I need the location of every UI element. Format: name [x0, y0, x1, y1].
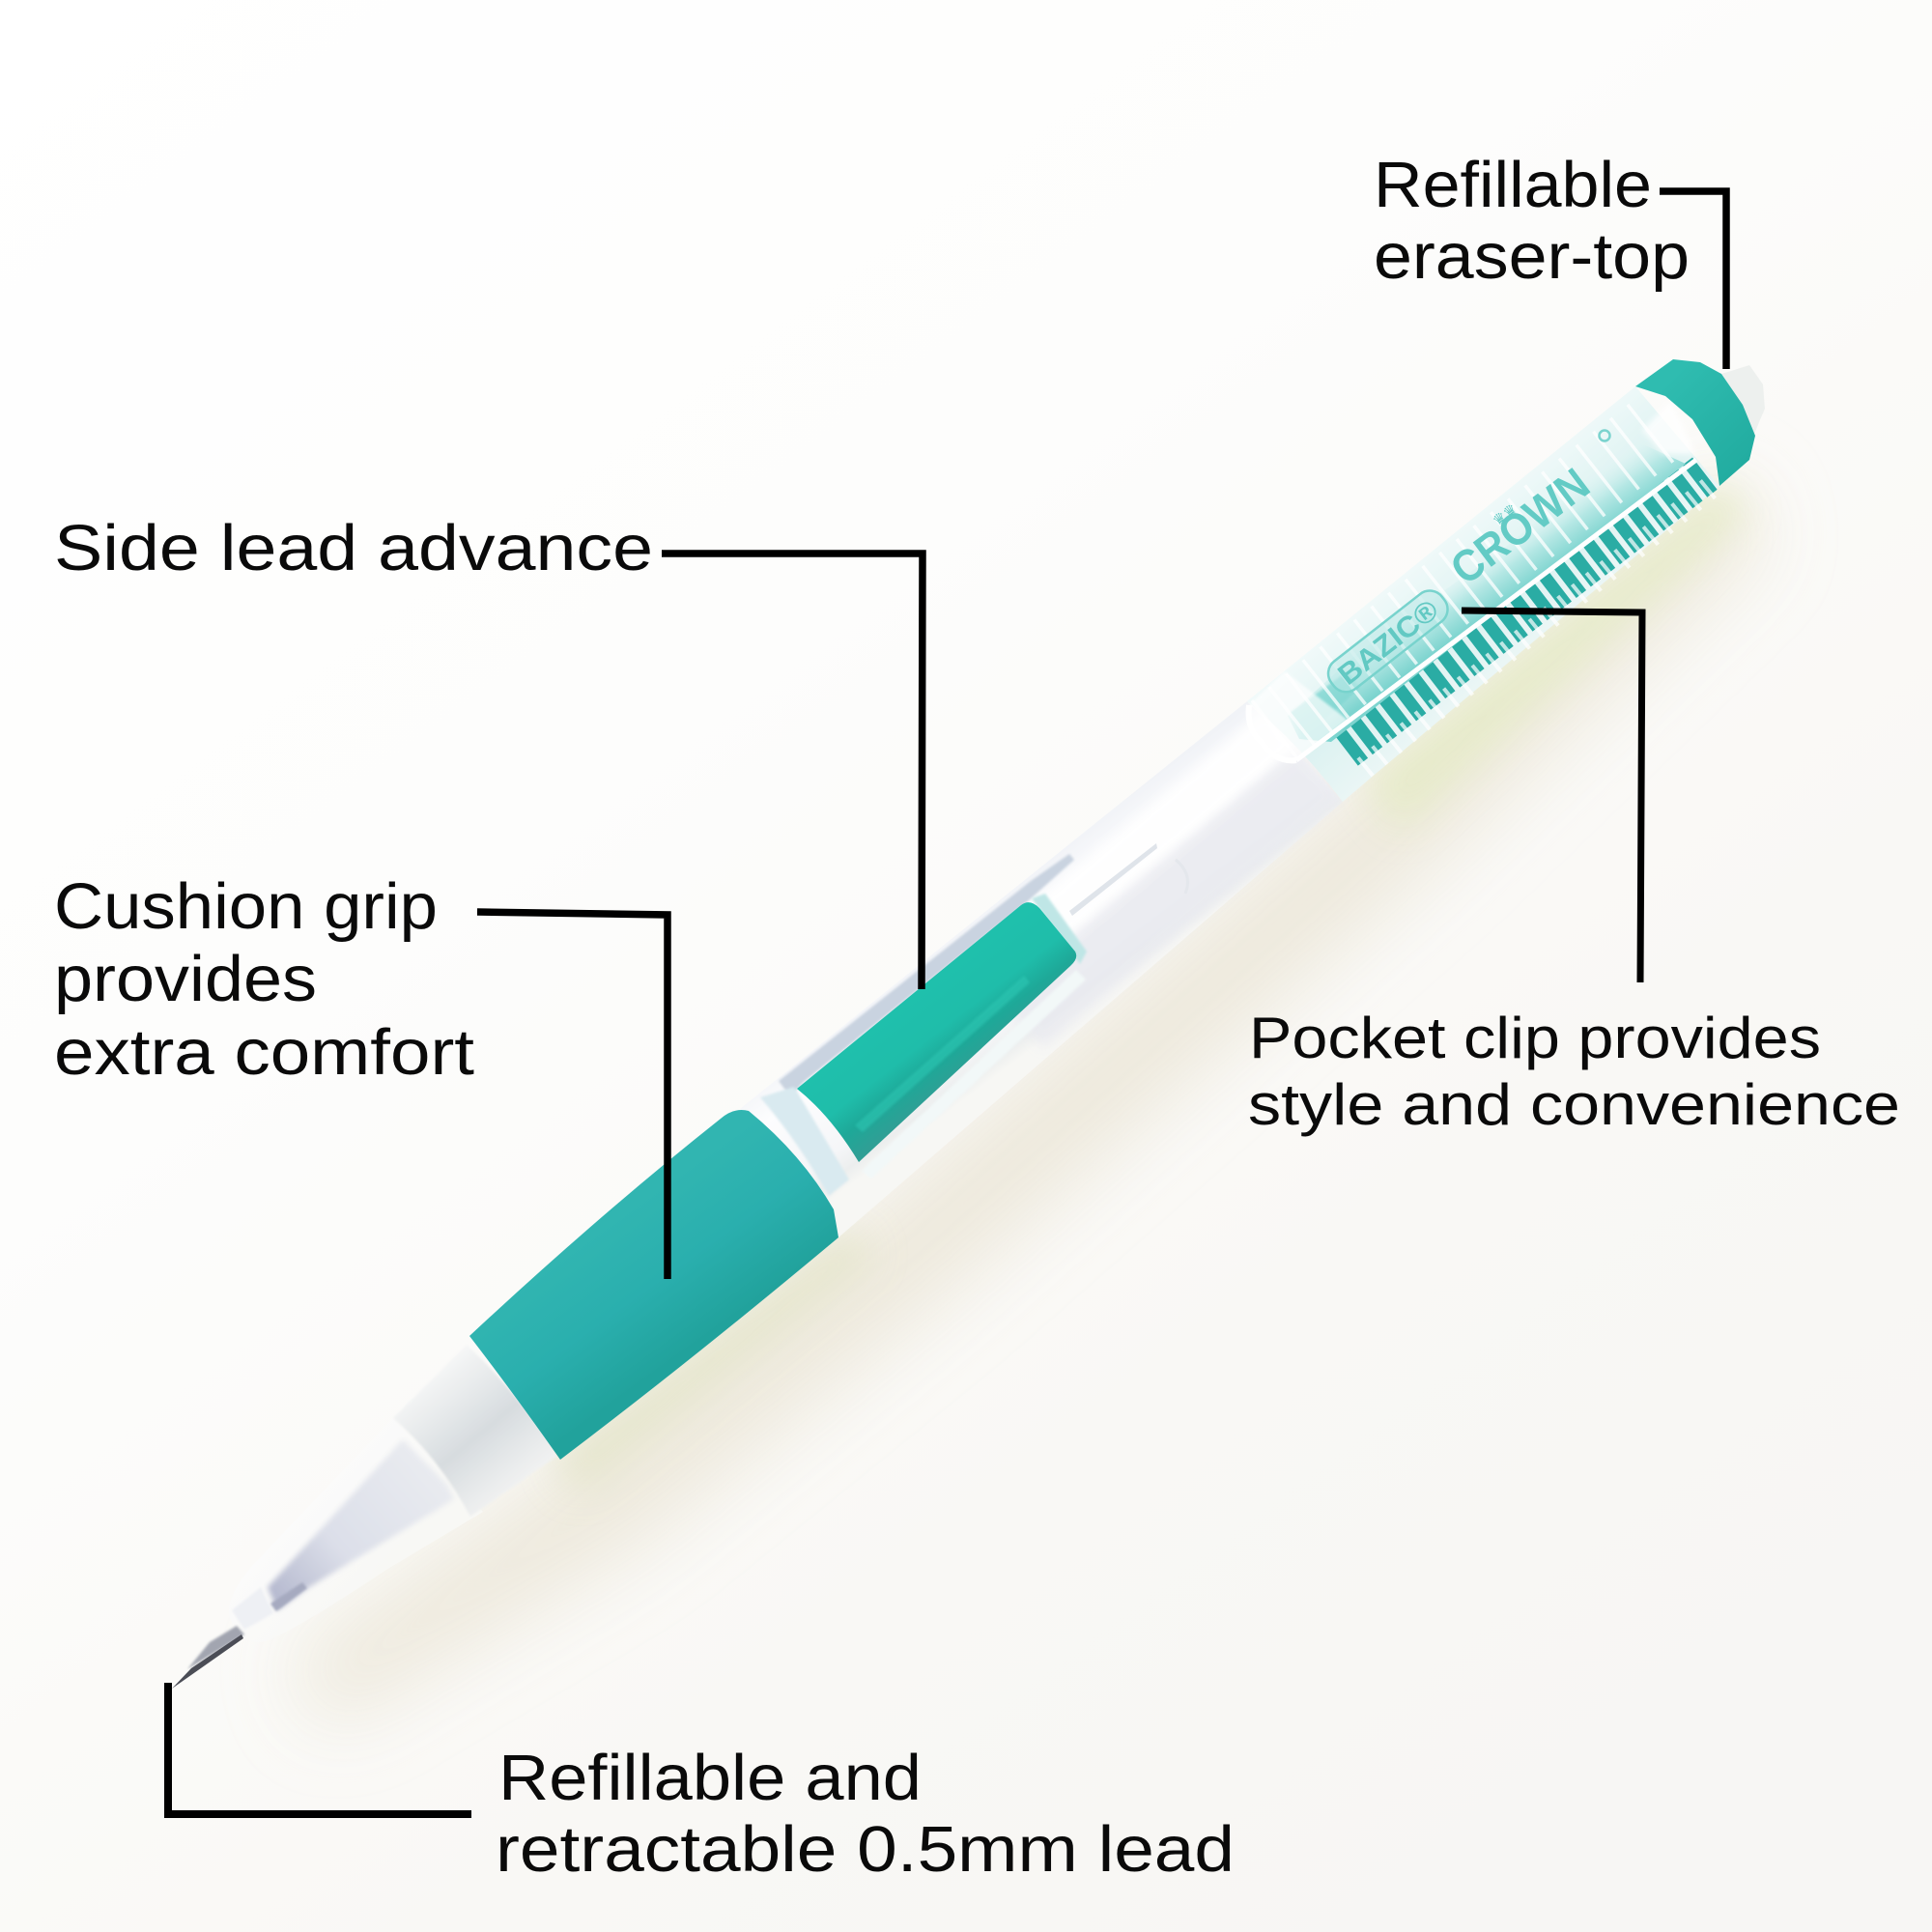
pale teal refill: [1288, 440, 1686, 742]
pencil: eraser: [1721, 365, 1765, 446]
label text: [1374, 149, 1690, 293]
callout: refillable and retractable lead: [168, 1683, 1235, 1886]
barrel ribs: [1273, 423, 1663, 730]
label text: [1248, 1006, 1900, 1137]
pencil: ring between grip and button: [760, 1087, 849, 1196]
label text: Refillable and: [498, 1742, 922, 1814]
tip band: [270, 1582, 307, 1611]
leader line: [1462, 611, 1642, 982]
pencil: upper barrel with spring: [1247, 386, 1719, 802]
leader line: [662, 554, 923, 989]
callout: side lead advance: [54, 512, 923, 989]
label text: Refillable: [1374, 149, 1652, 221]
label text: [54, 870, 474, 1089]
pencil: inner metal sleeve: [268, 1439, 454, 1610]
pencil: frosted front section: [393, 1345, 557, 1517]
label text: Cushion grip: [54, 870, 438, 943]
tip tube: [187, 1626, 244, 1669]
pencil: teal end cap: [1635, 359, 1755, 486]
pencil: clear lower barrel: [740, 701, 1343, 1237]
label text: extra comfort: [54, 1016, 474, 1089]
pencil: metal tip and lead: [172, 1582, 307, 1689]
label text: retractable 0.5mm lead: [496, 1813, 1235, 1886]
lead point: [172, 1634, 243, 1689]
barrel inner track line: [1069, 843, 1157, 916]
button end ring: [1032, 894, 1087, 964]
clip ring: [1600, 431, 1609, 440]
callout: refillable eraser-top: [1374, 149, 1726, 369]
brand badge: [1322, 584, 1454, 698]
barrel section boundary: [1176, 860, 1187, 894]
spring lower ribs: [1364, 488, 1710, 768]
label text: Side lead advance: [54, 512, 653, 584]
refill blocks under clip: [1290, 671, 1360, 739]
label text: [496, 1742, 1235, 1886]
pencil: side lead advance button: [797, 894, 1087, 1179]
label text: eraser-top: [1374, 220, 1690, 293]
label text: provides: [54, 943, 317, 1015]
crown mark: ♛♛: [1490, 500, 1520, 529]
label text: style and convenience: [1248, 1072, 1900, 1137]
pencil: cushion grip: [469, 1110, 838, 1460]
callout: cushion grip: [54, 870, 668, 1279]
leader line: [477, 912, 668, 1279]
label text: Pocket clip provides: [1249, 1006, 1821, 1070]
clip highlight: [1642, 401, 1695, 454]
barrel window shadow: [779, 854, 1074, 1096]
brand badge: BAZIC®: [1332, 594, 1445, 692]
leader line: [1660, 191, 1726, 369]
tip collar: [232, 1587, 273, 1630]
callout: pocket clip: [1248, 611, 1900, 1137]
pencil: pocket clip: [1249, 401, 1696, 760]
pencil: clear cone: [229, 1418, 483, 1642]
mechanical pencil illustration: [172, 359, 1765, 1689]
brand name: CROWN: [1441, 458, 1599, 594]
leader line: [168, 1683, 471, 1814]
pen shadow on surface: [290, 473, 1768, 1729]
spring coils: [1346, 473, 1705, 750]
